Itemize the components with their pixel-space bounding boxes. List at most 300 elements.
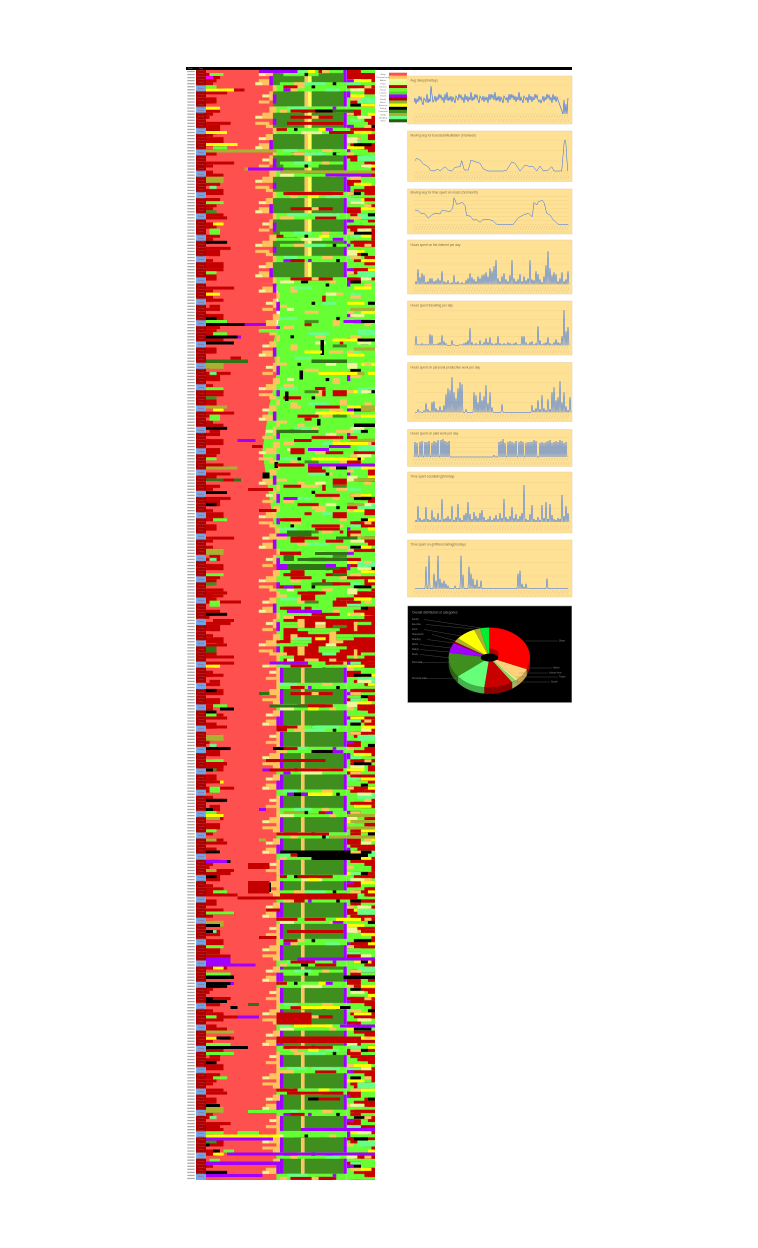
- weekday labels: Friday: [198, 423, 204, 425]
- weekday labels: Wednesday: [196, 375, 206, 377]
- weekday labels: Wednesday: [196, 823, 206, 825]
- weekday labels: Monday: [198, 134, 204, 136]
- weekday labels: Friday: [198, 850, 204, 852]
- weekday labels: Saturday: [197, 768, 205, 770]
- weekday labels: Thursday: [197, 676, 205, 678]
- date column: [187, 70, 195, 1180]
- weekday labels: Friday: [198, 487, 204, 489]
- weekday labels: Sunday: [198, 1027, 204, 1029]
- weekday labels: Sunday: [198, 88, 204, 90]
- magenta bar: [206, 77, 213, 79]
- pie leader lines: [420, 620, 558, 682]
- weekday labels: Monday: [198, 1094, 204, 1096]
- weekday labels: Wednesday: [196, 588, 206, 590]
- weekday labels: Monday: [198, 582, 204, 584]
- weekday labels: Wednesday: [196, 503, 206, 505]
- weekday labels: Monday: [198, 177, 204, 179]
- weekday labels: Tuesday: [198, 905, 204, 907]
- legend labels: Reading: [379, 117, 388, 119]
- yellow bars: [206, 72, 368, 1136]
- weekday labels: Monday: [198, 70, 204, 72]
- weekday labels: Friday: [198, 1149, 204, 1151]
- transition zone: [276, 540, 375, 668]
- weekday labels: Thursday: [197, 228, 205, 230]
- title: Moving avg for time spent on music (hrs/month): [410, 191, 478, 195]
- weekday labels: Friday: [198, 999, 204, 1001]
- weekday labels: Wednesday: [196, 183, 206, 185]
- title: Hours spent on personal productive work per day: [410, 365, 480, 369]
- weekday labels: Friday: [198, 1063, 204, 1065]
- weekday labels: Tuesday: [198, 329, 204, 331]
- legend labels: Family: [380, 99, 387, 101]
- weekday labels: Thursday: [197, 79, 205, 81]
- lower dark green weekday blocks: [206, 668, 375, 1180]
- weekday labels: Sunday: [198, 899, 204, 901]
- weekday labels: Monday: [198, 710, 204, 712]
- weekday labels: Sunday: [198, 877, 204, 879]
- weekday labels: Thursday: [197, 164, 205, 166]
- weekday labels: Sunday: [198, 643, 204, 645]
- weekday labels: Saturday: [197, 107, 205, 109]
- weekday labels: Friday: [198, 743, 204, 745]
- weekday labels: Tuesday: [198, 734, 204, 736]
- weekday labels: Friday: [198, 509, 204, 511]
- weekday labels: Monday: [198, 91, 204, 93]
- dating line series: [415, 556, 568, 589]
- pie labels left: Reading: [412, 639, 421, 641]
- upper dark green weekday blocks: [206, 70, 375, 283]
- weekday labels: Thursday: [197, 954, 205, 956]
- weekday labels: Saturday: [197, 938, 205, 940]
- pie labels right: [549, 640, 566, 684]
- weekday labels: Monday: [198, 923, 204, 925]
- weekday labels: Wednesday: [196, 972, 206, 974]
- red dominated block: [283, 616, 375, 662]
- weekday labels: Monday: [198, 859, 204, 861]
- legend: [376, 70, 408, 122]
- weekday labels: Sunday: [198, 344, 204, 346]
- weekday labels: Tuesday: [198, 585, 204, 587]
- weekday labels: Tuesday: [198, 756, 204, 758]
- pie hole: [481, 648, 499, 662]
- weekday labels: Wednesday: [196, 268, 206, 270]
- weekday labels: Thursday: [197, 996, 205, 998]
- title: Time spent socialising(hrs/day): [410, 475, 454, 479]
- weekday labels: Saturday: [197, 960, 205, 962]
- weekday labels: Thursday: [197, 292, 205, 294]
- weekday labels: Saturday: [197, 917, 205, 919]
- weekday labels: Thursday: [197, 655, 205, 657]
- weekday labels: Thursday: [197, 484, 205, 486]
- weekday labels: Saturday: [197, 725, 205, 727]
- weekday labels: Wednesday: [196, 332, 206, 334]
- weekday labels: Saturday: [197, 213, 205, 215]
- weekday labels: Friday: [198, 935, 204, 937]
- weekday labels: Saturday: [197, 896, 205, 898]
- weekday labels: Tuesday: [198, 521, 204, 523]
- weekday labels: Monday: [198, 305, 204, 307]
- weekday labels: Thursday: [197, 271, 205, 273]
- pie labels left: Music: [412, 644, 419, 646]
- weekday labels: Sunday: [198, 1133, 204, 1135]
- legend colour swatches: [389, 73, 407, 122]
- weekday labels: Monday: [198, 689, 204, 691]
- weekday labels: Saturday: [197, 640, 205, 642]
- title: Moving avg for Exercise/Meditation (hrs/week): [410, 133, 476, 137]
- weekday labels: Thursday: [197, 420, 205, 422]
- weekday labels: Saturday: [197, 597, 205, 599]
- weekday labels: Friday: [198, 1127, 204, 1129]
- weekday labels: Saturday: [197, 426, 205, 428]
- weekday labels: Saturday: [197, 1152, 205, 1154]
- weekday labels: Friday: [198, 871, 204, 873]
- panel: overall category distribution pie chart: [408, 606, 572, 702]
- weekday labels: Friday: [198, 594, 204, 596]
- weekday labels: Thursday: [197, 527, 205, 529]
- weekday labels: Tuesday: [198, 670, 204, 672]
- weekday labels: Thursday: [197, 207, 205, 209]
- productive work line series: [415, 377, 571, 412]
- weekday labels: Sunday: [198, 216, 204, 218]
- weekday labels: Wednesday: [196, 652, 206, 654]
- weekday labels: Thursday: [197, 911, 205, 913]
- weekday labels: [196, 70, 206, 1178]
- weekday labels: Wednesday: [196, 1036, 206, 1038]
- weekday labels: Monday: [198, 411, 204, 413]
- weekday column: [196, 70, 206, 1180]
- weekday labels: Wednesday: [196, 140, 206, 142]
- weekday labels: Tuesday: [198, 350, 204, 352]
- weekday labels: Tuesday: [198, 1011, 204, 1013]
- weekday labels: Friday: [198, 317, 204, 319]
- weekday labels: Monday: [198, 539, 204, 541]
- travelling line series: [415, 310, 569, 345]
- pie labels right: Travel: [559, 676, 566, 678]
- weekday labels: Wednesday: [196, 161, 206, 163]
- weekday labels: Friday: [198, 573, 204, 575]
- dark green bars: [206, 111, 357, 1005]
- weekday labels: Monday: [198, 475, 204, 477]
- weekday labels: Sunday: [198, 1155, 204, 1157]
- weekday labels: Saturday: [197, 981, 205, 983]
- weekday labels: Sunday: [198, 131, 204, 133]
- weekday labels: Monday: [198, 944, 204, 946]
- right strip base: [347, 70, 375, 1180]
- weekday labels: Monday: [198, 838, 204, 840]
- legend labels: Social: [380, 90, 386, 92]
- weekday labels: Thursday: [197, 783, 205, 785]
- title: Hours spent on paid work per day: [410, 431, 459, 435]
- weekday labels: Saturday: [197, 235, 205, 237]
- weekday labels: Thursday: [197, 1146, 205, 1148]
- weekday labels: Friday: [198, 1170, 204, 1172]
- weekday labels: Tuesday: [198, 73, 204, 75]
- pie labels left: Study: [412, 653, 419, 656]
- weekday labels: Monday: [198, 241, 204, 243]
- weekday labels: Saturday: [197, 171, 205, 173]
- weekday labels: Wednesday: [196, 844, 206, 846]
- pie title: Overall distribution of categories: [412, 610, 458, 614]
- weekday labels: Thursday: [197, 143, 205, 145]
- weekday labels: Thursday: [197, 847, 205, 849]
- black bars: [206, 111, 375, 1172]
- olive bars: [206, 151, 375, 1032]
- weekday labels: Thursday: [197, 634, 205, 636]
- weekday labels: Tuesday: [198, 628, 204, 630]
- panel: travelling hours chart: [408, 301, 572, 355]
- weekday labels: Friday: [198, 1021, 204, 1023]
- weekday labels: Monday: [198, 1136, 204, 1138]
- panel: music moving average chart: [408, 189, 572, 234]
- weekday labels: Wednesday: [196, 417, 206, 419]
- weekday labels: Sunday: [198, 536, 204, 538]
- panel: socialising chart: [408, 472, 572, 533]
- weekday labels: Sunday: [198, 259, 204, 261]
- weekday labels: Wednesday: [196, 951, 206, 953]
- weekday labels: Monday: [198, 369, 204, 371]
- weekday labels: Wednesday: [196, 524, 206, 526]
- pie labels right: Admin: [553, 666, 560, 670]
- light red sleep block: [206, 70, 276, 1180]
- weekday labels: Tuesday: [198, 798, 204, 800]
- weekday labels: Wednesday: [196, 887, 206, 889]
- legend labels: Travel: [380, 95, 386, 98]
- weekday labels: Friday: [198, 210, 204, 212]
- pie slices: [449, 628, 530, 688]
- weekday labels: Saturday: [197, 1173, 205, 1175]
- weekday labels: Wednesday: [196, 1079, 206, 1081]
- weekday labels: Thursday: [197, 804, 205, 806]
- weekday labels: Saturday: [197, 832, 205, 834]
- weekday labels: Thursday: [197, 762, 205, 764]
- weekday labels: Wednesday: [196, 865, 206, 867]
- weekday labels: Thursday: [197, 932, 205, 934]
- weekday labels: Tuesday: [198, 713, 204, 715]
- central noise in mid zones: [276, 283, 375, 668]
- weekday labels: Tuesday: [198, 116, 204, 118]
- panel: internet hours chart: [408, 240, 572, 294]
- weekday labels: Tuesday: [198, 884, 204, 886]
- weekday labels: Thursday: [197, 1167, 205, 1169]
- weekday labels: Tuesday: [198, 1075, 204, 1077]
- weekday labels: Saturday: [197, 128, 205, 130]
- weekday labels: Thursday: [197, 314, 205, 316]
- pie labels right: Leisure time: [549, 672, 562, 674]
- weekday labels: Saturday: [197, 299, 205, 301]
- pie labels left: Housework: [412, 633, 424, 636]
- weekday labels: Monday: [198, 198, 204, 200]
- title: Time spent on girlfriend dating(hrs/day): [410, 542, 466, 546]
- weekday labels: Monday: [198, 262, 204, 264]
- weekday labels: Tuesday: [198, 820, 204, 822]
- weekday labels: Tuesday: [198, 478, 204, 480]
- weekday labels: Wednesday: [196, 311, 206, 313]
- weekday labels: Saturday: [197, 1130, 205, 1132]
- weekday labels: Wednesday: [196, 631, 206, 633]
- weekday labels: Sunday: [198, 387, 204, 389]
- weekday labels: Tuesday: [198, 1097, 204, 1099]
- weekday labels: Thursday: [197, 698, 205, 700]
- pie labels left: Dating: [412, 648, 419, 651]
- panel: paid work chart: [408, 430, 572, 466]
- weekday labels: Sunday: [198, 558, 204, 560]
- weekday labels: Saturday: [197, 1024, 205, 1026]
- legend labels: Dating: [380, 107, 387, 110]
- weekday labels: Friday: [198, 722, 204, 724]
- interrupted weekday rows: [276, 70, 347, 1180]
- pie labels left: Family: [412, 619, 420, 621]
- weekday labels: Friday: [198, 978, 204, 980]
- weekday labels: Monday: [198, 518, 204, 520]
- weekday labels: Monday: [198, 987, 204, 989]
- weekday labels: Wednesday: [196, 759, 206, 761]
- weekday labels: Friday: [198, 530, 204, 532]
- weekday labels: Tuesday: [198, 606, 204, 608]
- header bar: [186, 67, 572, 70]
- weekday labels: Sunday: [198, 152, 204, 154]
- weekday labels: Tuesday: [198, 649, 204, 651]
- weekday labels: Wednesday: [196, 204, 206, 206]
- weekday labels: Saturday: [197, 277, 205, 279]
- weekday labels: Tuesday: [198, 1118, 204, 1120]
- weekday labels: Sunday: [198, 408, 204, 410]
- weekday labels: Wednesday: [196, 929, 206, 931]
- right strip noise: [347, 70, 375, 1180]
- weekday labels: Friday: [198, 125, 204, 127]
- weekday labels: Monday: [198, 667, 204, 669]
- weekday labels: Tuesday: [198, 862, 204, 864]
- header bar: Date: [188, 67, 193, 70]
- weekday labels: Saturday: [197, 320, 205, 322]
- weekday labels: Wednesday: [196, 695, 206, 697]
- purple bars: [206, 72, 375, 1175]
- weekday labels: Monday: [198, 454, 204, 456]
- weekday labels: Friday: [198, 146, 204, 148]
- weekday labels: Sunday: [198, 579, 204, 581]
- weekday labels: Monday: [198, 347, 204, 349]
- weekday labels: Saturday: [197, 490, 205, 492]
- weekday labels: Friday: [198, 274, 204, 276]
- weekday labels: Thursday: [197, 1060, 205, 1062]
- weekday labels: Friday: [198, 295, 204, 297]
- weekday labels: Friday: [198, 829, 204, 831]
- weekday labels: Tuesday: [198, 969, 204, 971]
- weekday labels: Wednesday: [196, 1057, 206, 1059]
- weekday labels: Sunday: [198, 515, 204, 517]
- exercise line series: [415, 141, 568, 171]
- pie labels left: Paid work: [412, 661, 423, 664]
- weekday labels: Thursday: [197, 591, 205, 593]
- weekday labels: Tuesday: [198, 1033, 204, 1035]
- weekday labels: Thursday: [197, 719, 205, 721]
- weekday labels: Friday: [198, 231, 204, 233]
- weekday labels: Monday: [198, 752, 204, 754]
- weekday labels: Sunday: [198, 302, 204, 304]
- weekday labels: Tuesday: [198, 414, 204, 416]
- weekday labels: Monday: [198, 433, 204, 435]
- weekday labels: Thursday: [197, 612, 205, 614]
- weekday labels: Monday: [198, 902, 204, 904]
- weekday labels: Wednesday: [196, 481, 206, 483]
- panel: exercise moving average chart: [408, 131, 572, 182]
- weekday labels: Monday: [198, 1158, 204, 1160]
- weekday labels: Tuesday: [198, 542, 204, 544]
- weekday labels: Wednesday: [196, 119, 206, 121]
- header bar: Day: [199, 68, 204, 70]
- weekday labels: Thursday: [197, 378, 205, 380]
- weekday labels: Wednesday: [196, 460, 206, 462]
- weekday labels: Wednesday: [196, 1121, 206, 1123]
- weekday labels: Monday: [198, 774, 204, 776]
- weekday labels: Tuesday: [198, 94, 204, 96]
- weekday labels: Sunday: [198, 174, 204, 176]
- weekday labels: Saturday: [197, 512, 205, 514]
- weekday labels: Thursday: [197, 868, 205, 870]
- weekday labels: Monday: [198, 497, 204, 499]
- weekday labels: Monday: [198, 561, 204, 563]
- weekday labels: Friday: [198, 189, 204, 191]
- weekday labels: Wednesday: [196, 396, 206, 398]
- weekday labels: Friday: [198, 615, 204, 617]
- weekday labels: Saturday: [197, 874, 205, 876]
- weekday labels: Sunday: [198, 323, 204, 325]
- weekday labels: Wednesday: [196, 1100, 206, 1102]
- weekday labels: Sunday: [198, 984, 204, 986]
- weekday labels: Sunday: [198, 813, 204, 815]
- weekday labels: Tuesday: [198, 457, 204, 459]
- title: Avg Sleep(hrs/day): [410, 78, 438, 82]
- heatmap: half-hourly activity grid: [206, 70, 375, 1180]
- legend labels: [376, 74, 391, 122]
- weekday labels: Tuesday: [198, 265, 204, 267]
- weekday labels: Sunday: [198, 451, 204, 453]
- weekday labels: Friday: [198, 1042, 204, 1044]
- title: Hours spent travelling per day: [410, 304, 453, 308]
- weekday labels: Saturday: [197, 576, 205, 578]
- weekday labels: Wednesday: [196, 780, 206, 782]
- weekday labels: Saturday: [197, 661, 205, 663]
- weekday labels: Wednesday: [196, 1164, 206, 1166]
- panel: average sleep chart: [408, 76, 572, 124]
- weekday labels: Monday: [198, 731, 204, 733]
- pie labels left: [412, 619, 427, 680]
- weekday labels: Tuesday: [198, 244, 204, 246]
- weekday labels: Saturday: [197, 469, 205, 471]
- weekday labels: Thursday: [197, 356, 205, 358]
- weekday labels: Tuesday: [198, 1161, 204, 1163]
- weekday labels: Tuesday: [198, 1054, 204, 1056]
- legend labels: Paid work: [378, 110, 389, 113]
- weekday labels: Saturday: [197, 533, 205, 535]
- pie labels left: Food: [412, 629, 418, 631]
- weekday labels: Saturday: [197, 810, 205, 812]
- weekday labels: Friday: [198, 359, 204, 361]
- weekday labels: Tuesday: [198, 926, 204, 928]
- weekday labels: Monday: [198, 219, 204, 221]
- weekday labels: Saturday: [197, 1109, 205, 1111]
- weekday labels: Sunday: [198, 963, 204, 965]
- weekday labels: Saturday: [197, 1088, 205, 1090]
- weekday labels: Sunday: [198, 366, 204, 368]
- weekday labels: Monday: [198, 326, 204, 328]
- pie labels right: Sleep: [559, 640, 566, 642]
- weekday labels: Thursday: [197, 186, 205, 188]
- weekday labels: Thursday: [197, 122, 205, 124]
- weekday labels: Saturday: [197, 682, 205, 684]
- weekday labels: Monday: [198, 1051, 204, 1053]
- individual activity bars: [206, 72, 375, 1175]
- weekday labels: Wednesday: [196, 1015, 206, 1017]
